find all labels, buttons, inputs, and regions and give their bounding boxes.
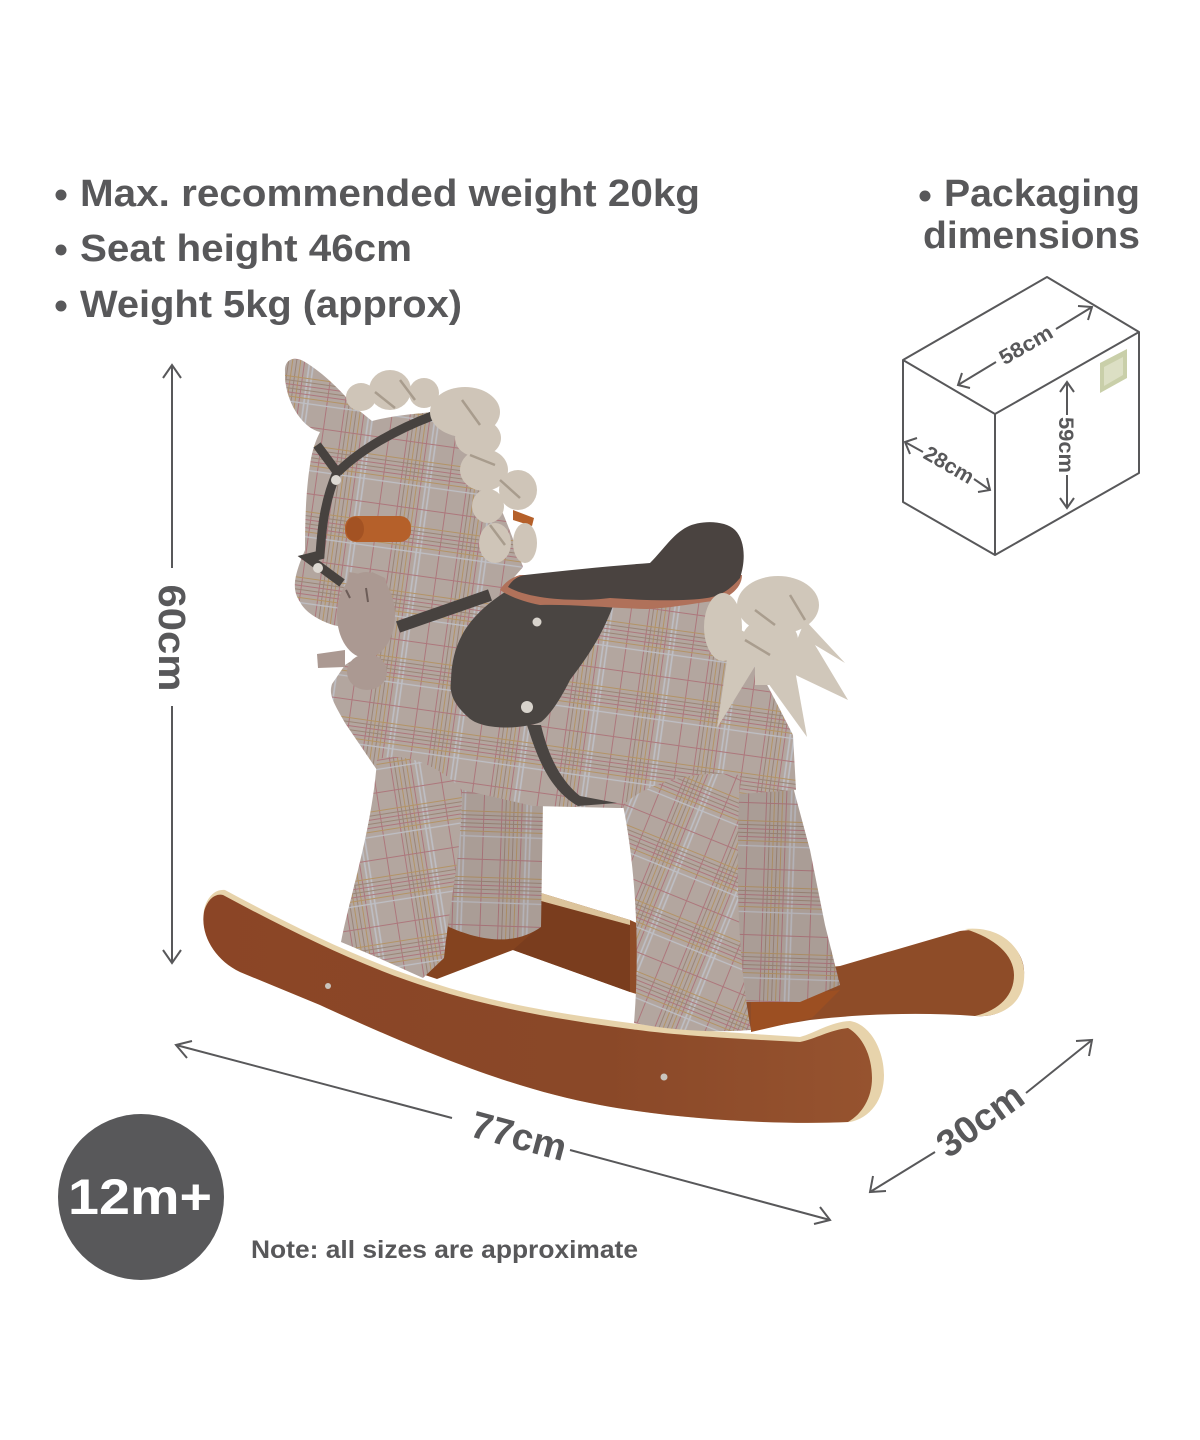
toy teddy in pocket [317,572,395,690]
saddle [451,522,744,806]
dimension arrow: length 77cm: 77cm [466,1104,571,1170]
dimension arrow: height 60cm: 60cm [150,584,192,692]
rocking horse illustration [203,359,1024,1123]
wooden handle [345,510,534,542]
text block: product specifications [56,173,700,326]
badge: age 12m+: 12m+ [68,1169,212,1225]
heading: packaging dimensions: dimensions [923,215,1140,257]
far legs [445,760,840,1002]
heading: packaging dimensions [920,173,1140,257]
dimension arrow: length 77cm [176,1041,830,1224]
icon: packaging box with dimensions: 28cm [920,442,978,489]
bridle straps [308,416,490,627]
heading: packaging dimensions: Packaging [944,173,1140,215]
note: sizes approximate: Note: all sizes are approximate [251,1236,638,1264]
dimension arrow: width 30cm [870,1040,1092,1192]
text block: product specifications: Weight 5kg (approx) [80,284,462,326]
icon: packaging box with dimensions [903,277,1139,555]
dimension arrow: height 60cm [150,365,192,963]
horse body and near legs [331,575,796,1031]
horse head and neck [285,359,523,650]
bridle rivets [313,475,341,573]
saddle seat [508,522,744,600]
saddle rim [500,575,742,609]
badge: age 12m+ [58,1114,224,1280]
text block: product specifications: Seat height 46cm [80,228,412,270]
text block: product specifications: Max. recommended weight 20kg [80,173,700,215]
icon: packaging box with dimensions: 58cm [995,321,1057,370]
near rocker [203,890,884,1123]
girth strap [527,725,617,806]
saddle flap [451,592,613,727]
icon: packaging box with dimensions: 59cm [1054,417,1077,473]
dimension arrow: width 30cm: 30cm [929,1075,1032,1166]
far rocker [425,893,1024,1032]
tail [704,576,848,737]
mane [346,370,537,563]
